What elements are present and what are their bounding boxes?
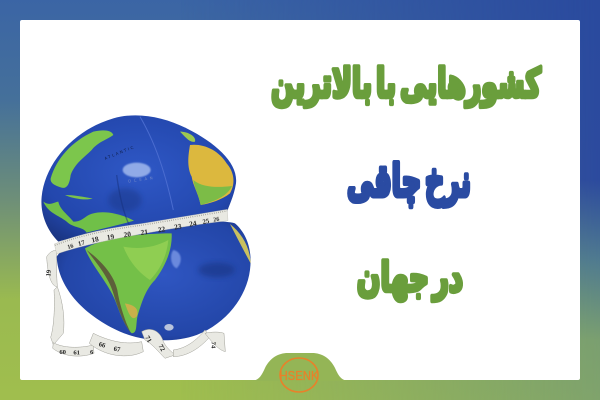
africa tip lower right: [230, 224, 251, 263]
tape lower numbers: 61: [73, 350, 80, 357]
tape lower numbers: 74: [210, 342, 217, 349]
logo tab: [250, 353, 350, 381]
tape numbers: 18: [90, 234, 100, 245]
logo badge: [250, 353, 350, 392]
logo ring: [280, 358, 318, 392]
south america: [85, 233, 172, 333]
tape numbers: [67, 217, 220, 251]
tape lower numbers: 66: [98, 341, 107, 350]
title line 3: در جهان: [357, 255, 463, 301]
globe upper lobe: [41, 115, 236, 242]
tape lower numbers: 72: [157, 343, 166, 353]
icon: squeezed globe with measuring tape: [41, 115, 251, 358]
tape numbers: 25: [202, 218, 211, 226]
tape lower numbers: 71: [143, 335, 153, 344]
title line 1: کشورهایی با بالاترین: [271, 61, 541, 108]
globe seams: [140, 117, 173, 210]
background gradient right side: [274, 0, 600, 400]
tape lower numbers: 67: [113, 346, 121, 354]
tape lower strands: [47, 251, 225, 358]
tape numbers: 16: [67, 243, 74, 251]
africa: [188, 145, 234, 205]
tape numbers: 26: [213, 217, 220, 224]
tape numbers: 17: [77, 239, 86, 248]
tape numbers: 24: [188, 218, 198, 229]
tape numbers: 23: [173, 221, 183, 232]
globe lower lobe: [57, 221, 251, 340]
tape numbers: 20: [123, 229, 132, 239]
tape around waist: [54, 209, 228, 254]
tape lower numbers: 19: [45, 269, 53, 277]
tape lower numbers: 60: [59, 349, 67, 356]
north america: [51, 130, 113, 188]
tape numbers: 19: [106, 232, 115, 242]
valve: [164, 324, 174, 331]
tape lower numbers: 6: [90, 349, 94, 356]
tape lower numbers: [45, 269, 217, 357]
highlights: [123, 163, 151, 177]
globe upper lobe: OCEAN: [128, 175, 156, 184]
highlights: [171, 250, 181, 268]
tape numbers: 21: [140, 227, 149, 237]
ocean labels: ATLANTIC: [103, 144, 136, 161]
logo text: HSENK: [280, 368, 319, 383]
title line 2: نرخ چاقی: [347, 155, 471, 207]
tape numbers: 22: [157, 224, 166, 234]
